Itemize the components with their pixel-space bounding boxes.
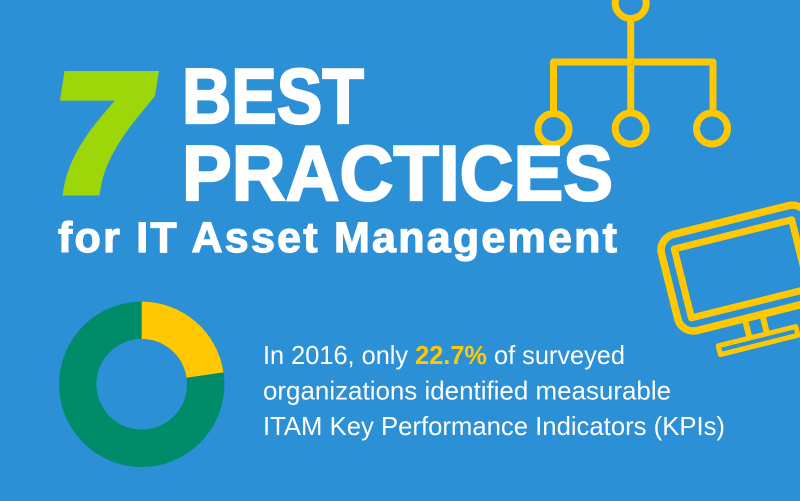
statistic text: ITAM Key Performance Indicators (KPIs) [263,411,725,441]
heading: best practices: BEST [182,52,364,140]
icon: network hierarchy [538,0,728,144]
statistic text: In 2016, only 22.7% of surveyed [263,340,625,370]
heading: best practices [182,52,613,217]
statistic text [263,340,725,441]
icon: computer monitor [658,202,800,362]
numeral 7: 7 [38,42,165,226]
subtitle: for IT Asset Management [58,214,617,262]
statistic text: organizations identified measurable [263,376,671,406]
heading: best practices: PRACTICES [182,129,613,217]
donut chart: 22.7 percent [78,320,206,448]
